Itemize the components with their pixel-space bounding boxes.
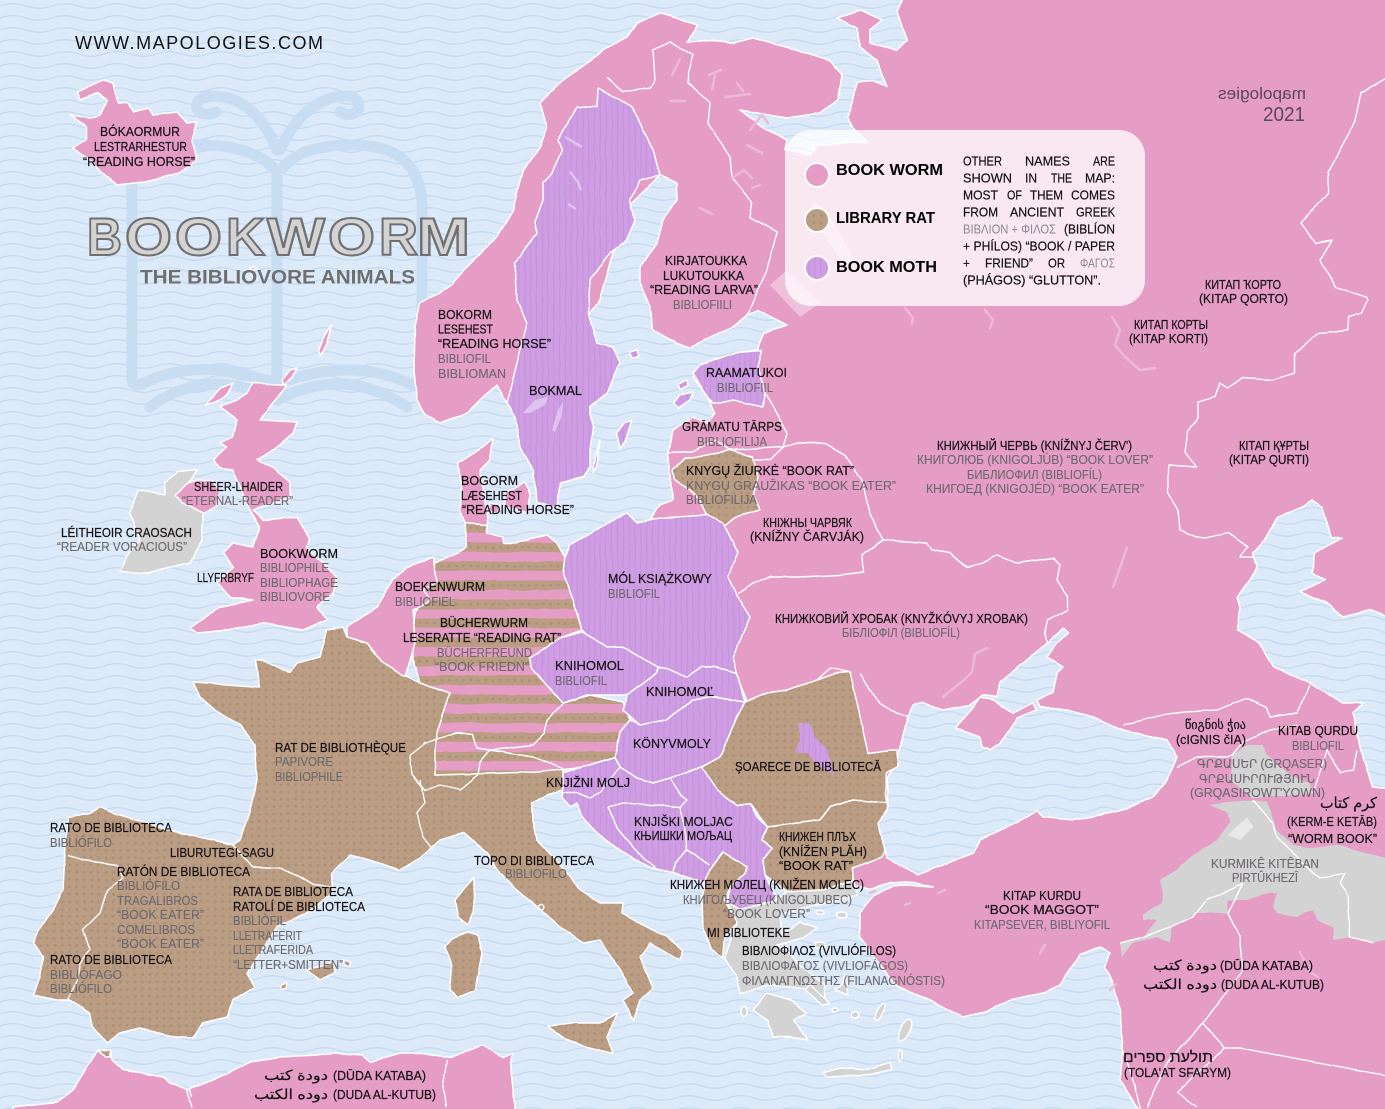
- label: Catalan: [233, 885, 366, 972]
- credit: mirrored mapologies 2021: mapologies: [1218, 84, 1306, 103]
- label: Denmark: [461, 474, 574, 517]
- label: Irish: LÉITHEOIR CRAOSACH: [61, 525, 192, 540]
- label: Lithuania: KNYGŲ GRAUŽIKAS “BOOK EATER”: [686, 478, 896, 493]
- legend: explanatory note: MAP:: [1085, 172, 1115, 186]
- label: Kazakh: [1229, 439, 1309, 467]
- label: Germany: “BOOK FRIEDN”: [435, 660, 529, 674]
- label: Georgian: წიგნის ჭია: [1185, 718, 1246, 732]
- legend: book moth: BOOK MOTH: [836, 259, 937, 276]
- land: Germany, Austria, Switzerland stripes: [413, 523, 630, 775]
- label: Irish: [57, 525, 192, 554]
- legend: book worm: BOOK WORM: [836, 162, 943, 179]
- label: Finland: “READING LARVA”: [650, 283, 758, 297]
- legend: explanatory note: FRIEND”: [985, 256, 1033, 270]
- label: Serbo-Croatian: [634, 814, 733, 843]
- land: Estonian islands: [673, 380, 693, 408]
- land: Crete: [823, 1063, 892, 1077]
- legend: book worm: [805, 162, 943, 187]
- label: Iceland: BÓKAORMUR: [100, 124, 180, 139]
- title: O: [125, 208, 172, 267]
- label: Netherlands: BOEKENWURM: [395, 580, 485, 594]
- label: Iceland: [83, 124, 195, 169]
- land: Ceuta: [97, 1050, 110, 1057]
- legend: explanatory note: SHOWN: [963, 172, 1012, 186]
- label: Turkish: KITAP KURDU: [1003, 889, 1081, 903]
- label: Spanish: RATÓN DE BIBLIOTECA: [117, 864, 251, 879]
- label: Catalan: RATOLÍ DE BIBLIOTECA: [233, 899, 366, 914]
- label: Armenian: ԳՐՔԱՍԵՐ (GRQASER): [1197, 757, 1327, 771]
- legend: explanatory note: THEM: [1030, 188, 1063, 202]
- label: Latvia: [682, 420, 782, 449]
- label: Middle East Arabic: دوده الكتب: [1143, 976, 1217, 993]
- land: Sicily, Sardinia, Corsica, Balearics: [280, 878, 617, 1053]
- label: Kazakh: (KITAP QURTI): [1229, 453, 1309, 467]
- label: Greece: ΦΙΛΑΝΑΓΝΩΣΤΗΣ (FILANAGNÓSTIS): [742, 973, 945, 988]
- label: Lithuania: [686, 463, 896, 507]
- label: Armenian: ԳՐՔԱՍԻՐՈՒԹՅՈՒՆ: [1199, 772, 1315, 786]
- label: Finland: KIRJATOUKKA: [665, 254, 748, 268]
- label: Italy: [474, 854, 595, 881]
- label: Portugal: BIBLIÓFILO: [50, 981, 112, 996]
- land: Norway, Finland, Baltics, Russia, Ukraine, Turkey, Middle East: [414, 0, 1385, 1109]
- label: Kazakh: КІТАП ҚҰРТЫ: [1239, 439, 1309, 453]
- label: Norway: BIBLIOFIL: [438, 352, 491, 366]
- label: Scottish Gaelic: SHEER-LHAIDER: [194, 480, 283, 494]
- label: Scottish Gaelic: [182, 480, 293, 508]
- legend: explanatory note: OR: [1048, 256, 1065, 270]
- legend: book moth: [805, 256, 937, 280]
- land: Benelux: [347, 557, 437, 677]
- label: North Africa Arabic: [254, 1067, 436, 1103]
- watermark: open book with antennae: [132, 96, 422, 407]
- label: Kurdish: [1211, 856, 1319, 885]
- legend: explanatory note: (PHÁGOS) “GLUTTON”.: [963, 272, 1101, 288]
- label: Albania: MI BIBLIOTEKE: [707, 926, 790, 940]
- legend: library rat: LIBRARY RAT: [836, 210, 936, 227]
- sea: Caspian: [1237, 500, 1385, 790]
- label: Spanish: BIBLIÓFILO: [117, 878, 180, 893]
- label: Russian: [917, 438, 1153, 496]
- label: Bulgaria: КНИЖЕН ПЛЪХ: [779, 830, 857, 844]
- land: Western Balkans: [562, 757, 777, 910]
- legend: explanatory note: ΦΑΓΟΣ: [1080, 256, 1115, 270]
- label: Persian: “WORM BOOK”: [1288, 832, 1377, 846]
- label: Portugal: BIBLIÓFAGO: [50, 967, 122, 982]
- label: Catalan: LLETRAFERIDA: [233, 943, 314, 957]
- land: Slovakia: [623, 667, 745, 725]
- legend: explanatory note: MOST: [963, 188, 998, 202]
- label: Bashkir: КИТАП ҠОРТО: [1205, 278, 1281, 292]
- land: Denmark: [458, 438, 530, 525]
- label: Spanish: “BOOK EATER”: [117, 937, 204, 951]
- label: Greece: ΒΙΒΛΙΟΦΑΓΟΣ (VIVLIOFÁGOS): [742, 958, 908, 973]
- label: Belarusian: (KNÍŽNY ČARVJÁK): [750, 529, 864, 544]
- region: Lake Van: [1228, 817, 1253, 840]
- label: Welsh: LLYFRBRYF: [197, 571, 254, 585]
- title: K: [226, 208, 265, 267]
- label: Germany: BÜCHERWURM: [440, 616, 528, 630]
- label: France: [275, 740, 406, 784]
- label: Georgian: [1176, 718, 1246, 747]
- land: Czechia: [530, 632, 658, 703]
- label: Georgian: (cIGNIS čIA): [1176, 733, 1246, 747]
- label: Spanish: [117, 864, 251, 951]
- map: lakes and rivers: [523, 59, 1318, 990]
- label: Turkish: “BOOK MAGGOT”: [985, 903, 1099, 917]
- label: Germany: BÜCHERFREUND: [437, 646, 532, 660]
- legend: explanatory note: +: [963, 256, 970, 270]
- label: Czechia: [555, 659, 624, 688]
- land: Ireland: [120, 470, 203, 573]
- land: Bulgaria: [762, 800, 888, 892]
- label: Belarusian: [750, 516, 864, 544]
- label: Denmark: “READING HORSE”: [462, 503, 574, 517]
- label: English: [260, 547, 338, 604]
- label: Italy: BIBLIOFILO: [505, 867, 567, 881]
- label: Persian: كرم كتاب: [1320, 795, 1378, 812]
- label: Azeri: KITAB QURDU: [1278, 724, 1358, 738]
- label: Czechia: BIBLIOFIL: [555, 674, 607, 688]
- legend: explanatory note: + PHÍLOS) “BOOK / PAPER: [963, 238, 1115, 254]
- label: Catalan: “LETTER+SMITTEN”: [233, 958, 343, 972]
- website url: WWW.MAPOLOGIES.COM: [75, 33, 323, 53]
- region: Armenia: [1230, 745, 1313, 798]
- label: Middle East Arabic: [1143, 957, 1324, 993]
- label: Hungary: KÖNYVMOLY: [633, 737, 712, 751]
- legend: explanatory note: NAMES: [1025, 154, 1070, 168]
- legend: explanatory note: COMES: [1071, 188, 1115, 202]
- sea: Black Sea and Azov: [878, 628, 1177, 875]
- label: Norway: BIBLIOMAN: [438, 367, 506, 381]
- label: Galicia: BIBLIÓFILO: [50, 835, 112, 850]
- land: Crimea: [955, 697, 1037, 750]
- label: Iceland: “READING HORSE”: [83, 155, 195, 169]
- label: Azeri: BIBLIOFIL: [1292, 739, 1344, 753]
- label: Poland: BIBLIOFIL: [608, 587, 660, 601]
- legend: library rat: [805, 208, 936, 232]
- label: Finland: [650, 254, 758, 312]
- label: Latvia: GRĀMATU TĀRPS: [682, 420, 782, 434]
- label: Romania: ŞOARECE DE BIBLIOTECĂ: [735, 759, 882, 774]
- land: Sweden: [507, 88, 660, 507]
- label: Tatar: КИТАП КОРТЫ: [1134, 318, 1208, 332]
- label: Lithuania: KNYGŲ ŽIURKĖ “BOOK RAT”: [686, 463, 854, 478]
- label: Netherlands: BIBLIOFIEL: [395, 595, 455, 609]
- label: Belarusian: КНІЖНЫ ЧАРВЯК: [763, 516, 853, 530]
- label: Bashkir: (KITAP QORTO): [1199, 292, 1288, 306]
- label: Middle East Arabic: (DŪDA KATABA): [1220, 959, 1313, 973]
- label: Hebrew: [1123, 1049, 1231, 1080]
- label: Greece: ΒΙΒΛΙΟΦΙΛΟΣ (VIVLIÓFILOS): [742, 943, 896, 958]
- land: Greece mainland: [725, 880, 857, 1000]
- label: Slovenia: KNJIŽNI MOLJ: [546, 775, 630, 790]
- label: Finland: BIBLIOFIILI: [673, 298, 732, 312]
- label: North Africa Arabic: (DUDA AL-KUTUB): [333, 1088, 436, 1102]
- label: Galicia: RATO DE BIBLIOTECA: [50, 821, 173, 835]
- label: Turkish: KITAPSEVER, BIBLIYOFIL: [974, 918, 1110, 932]
- label: Armenian: (GRQASIROWT'YOWN): [1190, 786, 1325, 800]
- label: Hebrew: תולעת ספרים: [1123, 1049, 1213, 1066]
- label: Middle East Arabic: دودة كتب: [1153, 957, 1217, 974]
- label: Portugal: RATO DE BIBLIOTECA: [50, 953, 173, 967]
- label: Germany: [403, 616, 561, 674]
- label: North Africa Arabic: (DŪDA KATABA): [333, 1069, 426, 1083]
- label: Italy: TOPO DI BIBLIOTECA: [474, 854, 595, 868]
- label: Tatar: (KITAP KORTI): [1129, 332, 1208, 346]
- label: English: BOOKWORM: [260, 547, 338, 561]
- label: Poland: MÓL KSIĄŻKOWY: [608, 571, 713, 586]
- label: Lithuania: BIBLIOFILIJA: [686, 493, 758, 507]
- land: Iberia, France, Italy: [33, 627, 682, 1043]
- label: France: BIBLIOPHILE: [275, 770, 343, 784]
- label: Czechia: KNIHOMOL: [555, 659, 624, 673]
- label: Sweden: BOKMAL: [529, 384, 582, 398]
- land: Estonia: [693, 350, 765, 407]
- label: Finland: LUKUTOUKKA: [663, 269, 745, 283]
- label: English: BIBLIOPHAGE: [260, 576, 338, 590]
- title: M: [417, 208, 470, 267]
- land: Hungary: [615, 697, 745, 783]
- label: North Africa Arabic: دوده الكتب: [254, 1086, 328, 1103]
- label: Greece: [742, 943, 945, 988]
- label: North Macedonia: КНИЖЕН МОЛЕЦ (KNIŽEN MOLEC): [670, 877, 864, 892]
- label: North Africa Arabic: دودة كتب: [264, 1067, 328, 1084]
- label: English: BIBLIOVORE: [260, 590, 330, 604]
- land: Albania: [702, 852, 747, 958]
- label: Russian: БИБЛИОФИЛ (BIBLIOFÍL): [967, 467, 1102, 482]
- label: Portugal: [50, 953, 173, 996]
- land: Romania: [702, 672, 898, 827]
- credit: mirrored mapologies 2021: [1218, 84, 1306, 126]
- label: North Macedonia: [670, 877, 864, 921]
- legend: explanatory note: OTHER: [963, 154, 1002, 168]
- label: Kurdish: PIRTÛKHEZÎ: [1232, 870, 1298, 885]
- label: Denmark: LÆSEHEST: [461, 489, 522, 503]
- legend: explanatory note: IN: [1025, 172, 1037, 186]
- label: Ukrainian: БІБЛІОФІЛ (BIBLIOFÍL): [842, 625, 960, 640]
- land: Gotland and Oland: [593, 350, 639, 473]
- title: W: [267, 208, 325, 267]
- label: Basque: LIBURUTEGI-SAGU: [170, 846, 274, 860]
- legend: explanatory note: GREEK: [1076, 206, 1116, 220]
- label: Kurdish: KURMIKÊ KITÊBAN: [1211, 856, 1319, 871]
- land: Scottish isles and Faroes: [205, 266, 332, 405]
- legend: explanatory note: OF: [1007, 188, 1022, 202]
- legend: explanatory note: [963, 154, 1116, 288]
- label: Russian: КНИГОЕД (KNIGOJÉD) “BOOK EATER”: [926, 481, 1144, 496]
- label: Spanish: “BOOK EATER”: [117, 908, 204, 922]
- legend: explanatory note: FROM: [963, 206, 998, 220]
- label: Irish: “READER VORACIOUS”: [57, 540, 187, 554]
- land: North Africa: [13, 1045, 516, 1109]
- label: Netherlands: [395, 580, 485, 609]
- label: Russian: КНИЖНЫЙ ЧЕРВЬ (KNÍŽNYJ ČERV'): [937, 438, 1132, 453]
- land: Poland: [563, 513, 750, 677]
- label: Hebrew: (TOLA'AT SFARYM): [1124, 1066, 1231, 1080]
- land: Greek islands: [741, 910, 915, 1061]
- label: Estonia: RAAMATUKOI: [706, 366, 787, 380]
- label: Tatar: [1129, 318, 1208, 346]
- label: Spanish: COMELIBROS: [117, 923, 195, 937]
- title: R: [379, 208, 418, 267]
- label: Norway: LESEHEST: [438, 322, 493, 336]
- label: Catalan: RATA DE BIBLIOTECA: [233, 885, 354, 899]
- label: Latvia: BIBLIOFILIJA: [697, 435, 768, 449]
- label: Ukrainian: [775, 611, 1028, 640]
- label: Galicia: [50, 821, 173, 850]
- subtitle: THE BIBLIOVORE ANIMALS: [140, 266, 415, 288]
- legend panel: [785, 130, 1145, 306]
- region: Kurdish area: [1120, 800, 1385, 957]
- label: Azeri: [1278, 724, 1358, 753]
- label: Scottish Gaelic: “ETERNAL-READER”: [182, 494, 293, 508]
- label: Norway: “READING HORSE”: [438, 337, 551, 351]
- title: O: [175, 208, 222, 267]
- legend: explanatory note: ANCIENT: [1010, 206, 1064, 220]
- label: Spanish: TRAGALIBROS: [117, 894, 198, 908]
- label: Slovakia: KNIHOMOĽ: [646, 685, 714, 699]
- credit: mirrored mapologies 2021: 2021: [1263, 104, 1305, 126]
- label: Ukrainian: КНИЖКОВИЙ ХРОБАК (KNYŽKÓVYJ XROBAK): [775, 611, 1028, 626]
- label: Bulgaria: “BOOK RAT”: [779, 859, 853, 873]
- label: France: RAT DE BIBLIOTHÈQUE: [275, 740, 406, 755]
- label: Middle East Arabic: (DUDA AL-KUTUB): [1221, 978, 1324, 992]
- land: Peloponnese: [753, 993, 808, 1040]
- label: France: PAPIVORE: [275, 755, 333, 769]
- label: English: BIBLIOPHILE: [260, 561, 329, 575]
- legend: explanatory note: ARE: [1093, 154, 1115, 168]
- legend: explanatory note: ΒΙΒΛΙΟΝ + ΦΙΛΟΣ: [963, 222, 1056, 236]
- label: Norway: BOKORM: [438, 308, 492, 322]
- legend: explanatory note: (BIBLÍON: [1064, 222, 1115, 236]
- land: Iceland: [70, 80, 197, 185]
- label: Bashkir: [1199, 278, 1288, 306]
- label: Bulgaria: [779, 830, 867, 873]
- label: Catalan: BIBLIÒFIL: [233, 913, 286, 928]
- land: Northern Ireland: [175, 480, 220, 513]
- label: Turkish: [974, 889, 1110, 932]
- label: Armenian: [1190, 757, 1327, 800]
- label: Denmark: BOGORM: [461, 474, 518, 488]
- label: Germany: LESERATTE “READING RAT”: [403, 631, 561, 645]
- label: Serbo-Croatian: КЊИШКИ МОЉАЦ: [634, 829, 733, 843]
- title: B: [87, 208, 122, 267]
- label: Persian: [1287, 795, 1378, 846]
- title: O: [328, 208, 375, 267]
- land: Lithuania: [673, 450, 760, 525]
- land: Great Britain: [190, 383, 337, 633]
- label: Serbo-Croatian: KNJIŠKI MOLJAC: [634, 814, 733, 829]
- label: Estonia: BIBLIOFIIL: [717, 381, 773, 395]
- label: Poland: [608, 571, 713, 601]
- label: Norway: [438, 308, 551, 381]
- label: Estonia: [706, 366, 787, 395]
- land: Transylvania purple patch: [795, 723, 835, 775]
- legend: explanatory note: THE: [1051, 172, 1072, 186]
- label: Russian: КНИГОЛЮБ (KNIGOLJÚB) “BOOK LOVER”: [917, 452, 1153, 467]
- label: North Macedonia: “BOOK LOVER”: [723, 907, 810, 921]
- label: Iceland: LESTRARHESTUR: [94, 140, 187, 154]
- label: North Macedonia: КНИГОЉУБЕЦ (KNIGOLJUBEC): [683, 893, 852, 907]
- label: Catalan: LLETRAFERIT: [233, 929, 302, 943]
- label: Bulgaria: (KNÍŽEN PLĂH): [779, 844, 867, 859]
